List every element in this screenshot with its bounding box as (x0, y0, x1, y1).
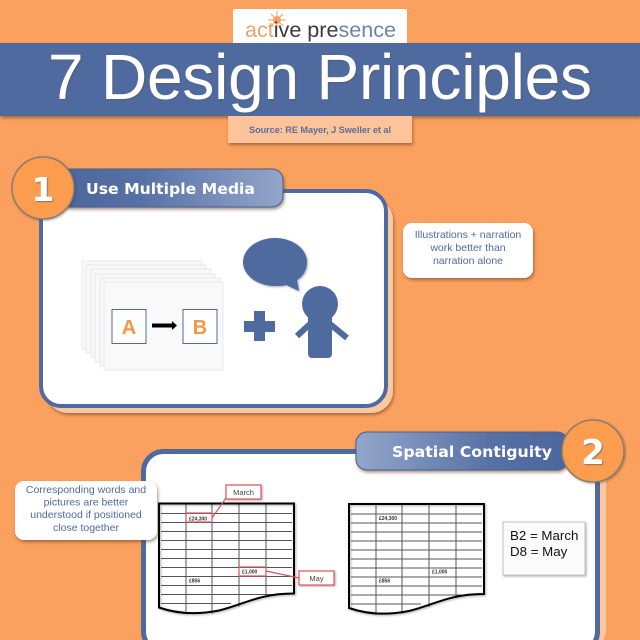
badge 2: 2 (581, 433, 605, 473)
box B: B (193, 317, 207, 339)
label: May (299, 571, 334, 585)
callout 2: understood if positioned (30, 509, 142, 521)
arrow (152, 321, 177, 330)
spreadsheet without labels (349, 504, 484, 614)
legend note (503, 522, 585, 575)
callout 2: pictures are better (44, 496, 129, 508)
label: March (226, 485, 261, 499)
spreadsheet with labels: £24,300 (189, 516, 207, 522)
callout 1 (403, 223, 533, 278)
callout 2 (15, 481, 157, 540)
box A (112, 310, 146, 344)
callout 2: close together (53, 522, 119, 534)
panel 2: spatial contiguity (144, 452, 606, 640)
callout 1: narration alone (433, 255, 503, 267)
logo: active presence (245, 19, 396, 42)
spreadsheet without labels: £856 (379, 578, 390, 584)
spreadsheet without labels: £24,300 (379, 516, 397, 522)
badge 1: 1 (32, 170, 54, 209)
callout 2: Corresponding words and (26, 484, 146, 496)
icon: speech bubble (243, 238, 307, 291)
badge 2 (562, 420, 624, 482)
header 2 (356, 432, 568, 470)
label: May: May (309, 574, 324, 583)
spreadsheet without labels: £1,000 (432, 570, 448, 576)
title banner: 7 Design Principles (48, 41, 592, 113)
callout 1: Illustrations + narration (415, 229, 521, 241)
spreadsheet with labels (159, 485, 334, 614)
label: March: March (233, 488, 254, 497)
logo (233, 9, 407, 45)
legend note: B2 = March (510, 528, 578, 543)
slide stack (82, 261, 223, 370)
icon: person (297, 286, 347, 358)
box A: A (122, 317, 136, 339)
header 2: Spatial Contiguity (392, 443, 552, 461)
panel 1: use multiple media (41, 191, 393, 413)
source box: Source: RE Mayer, J Sweller et al (249, 125, 391, 135)
header 1: Use Multiple Media (86, 180, 255, 198)
header 1 (60, 169, 283, 207)
callout 1: work better than (429, 242, 506, 254)
legend note: D8 = May (510, 544, 568, 559)
source box (228, 116, 412, 143)
box B (183, 310, 217, 344)
icon: plus (244, 311, 275, 341)
badge 1 (12, 157, 74, 219)
spreadsheet with labels: £1,000 (242, 570, 258, 576)
spreadsheet with labels: £856 (189, 578, 200, 584)
